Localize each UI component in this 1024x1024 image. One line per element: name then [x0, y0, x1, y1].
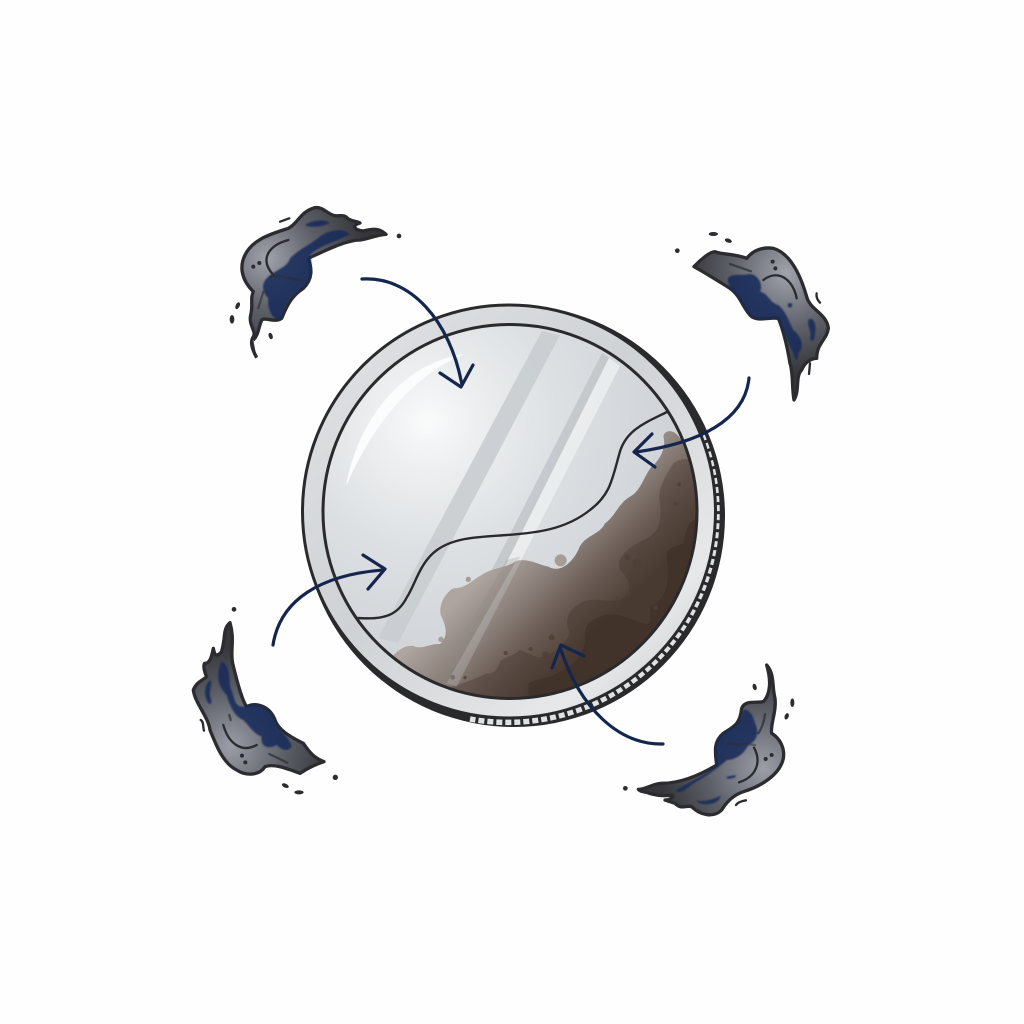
smudge: bottom right: [623, 665, 794, 815]
highlight crescent: [346, 354, 464, 486]
dirt mid layer: [450, 459, 696, 697]
coin rim: [302, 305, 716, 718]
smudge: bottom left: [193, 607, 338, 794]
reeded edge: [303, 305, 725, 727]
arrow: right: [634, 378, 749, 467]
streak bands: [378, 331, 620, 642]
coin face: [323, 324, 697, 698]
smudge: top right: [675, 232, 828, 400]
smudge: top left: [230, 208, 401, 358]
arrow: left: [273, 555, 385, 645]
faint streaks over dirt: [446, 556, 522, 686]
dirt specks: [450, 482, 681, 680]
dirt light layer: [394, 431, 696, 697]
wavy contamination line: [357, 412, 667, 618]
coin: [302, 305, 725, 727]
arrow: top left: [362, 279, 473, 387]
pale specks: [438, 554, 567, 642]
inner ring: [323, 324, 697, 698]
arrow: bottom: [552, 645, 663, 744]
dirt dark layer: [528, 520, 695, 694]
dirt area: [394, 431, 696, 697]
illustration: coin surrounded by smudges: [192, 206, 830, 816]
